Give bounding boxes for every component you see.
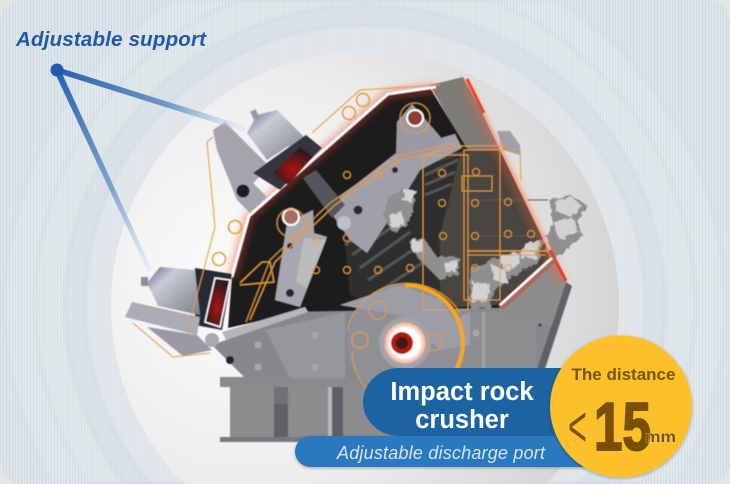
title pill: impact rock crusher: crusher [415,406,509,434]
yellow badge: distance under 15mm: The distance [572,365,675,384]
leader origin dot [50,64,64,76]
yellow badge: distance under 15mm: 15 [594,389,651,465]
orange blueprint lines [133,85,548,408]
lower adjustable support [125,267,232,356]
lower link arm [275,210,327,307]
hammer liner [296,238,326,288]
title pill: impact rock crusher: Impact rock [390,378,534,406]
lower connecting rod [222,307,308,340]
title pill: impact rock crusher [363,368,580,436]
lower housing [212,257,572,378]
crushing chamber dark interior [228,88,556,328]
discharge wall lug [497,131,520,155]
red glow along housing [232,88,436,277]
white housing edge [232,87,436,277]
leader lines to adjustable supports [50,64,245,272]
upper adjustable support [213,109,322,213]
rocks [384,188,587,310]
side plate on discharge wall [430,77,503,150]
yellow badge: distance under 15mm [550,336,692,478]
pivot pins [283,110,423,230]
piston rod in chamber [303,170,345,218]
discharge port pill [295,436,605,467]
base frame [220,377,440,442]
upper link arm [396,104,445,160]
crusher machine [125,77,587,442]
yellow badge: distance under 15mm: < [568,394,587,458]
discharge wall [462,78,566,310]
white disc behind machine [111,52,619,484]
heading: adjustable support: Adjustable support [15,28,207,51]
upper impact plate [327,134,462,253]
yellow badge: distance under 15mm: mm [645,429,676,446]
rotor disc [340,284,470,400]
discharge port pill: Adjustable discharge port [336,443,546,463]
